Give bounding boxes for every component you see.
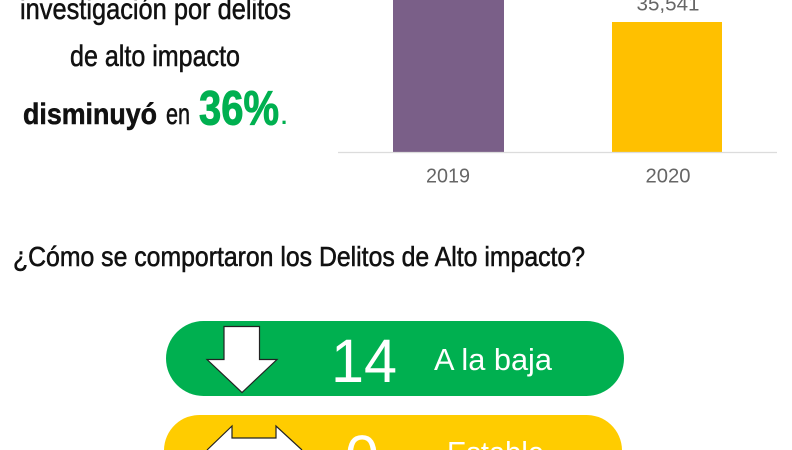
pill: green — [166, 321, 624, 396]
bar: 2019 — [393, 0, 504, 152]
pill: yellow — [164, 415, 622, 450]
text line: disminuyó en: en — [166, 98, 190, 131]
bar: 2020 — [612, 22, 722, 152]
text line: disminuyó en: disminuyó — [23, 98, 157, 131]
icon: down arrow — [207, 326, 277, 392]
panel: a la baja — [166, 321, 624, 396]
category label: 2019: 2019 — [426, 166, 470, 188]
text block: investigation summary — [20, 0, 291, 136]
text: period: . — [281, 104, 287, 129]
number: 14: 14 — [331, 327, 397, 395]
heading: question: ¿Cómo se comportaron los Delitos de Alto impacto? — [13, 241, 585, 272]
text line: de alto impacto: de alto impacto — [70, 40, 240, 73]
bar chart: 2019 vs 2020 — [338, 0, 777, 188]
icon: left-right arrow — [207, 426, 302, 450]
panel: estable — [164, 415, 622, 450]
category label: 2020: 2020 — [646, 166, 690, 188]
highlighted figure: 36%: 36% — [199, 82, 279, 136]
label: A la baja: A la baja — [434, 342, 553, 377]
